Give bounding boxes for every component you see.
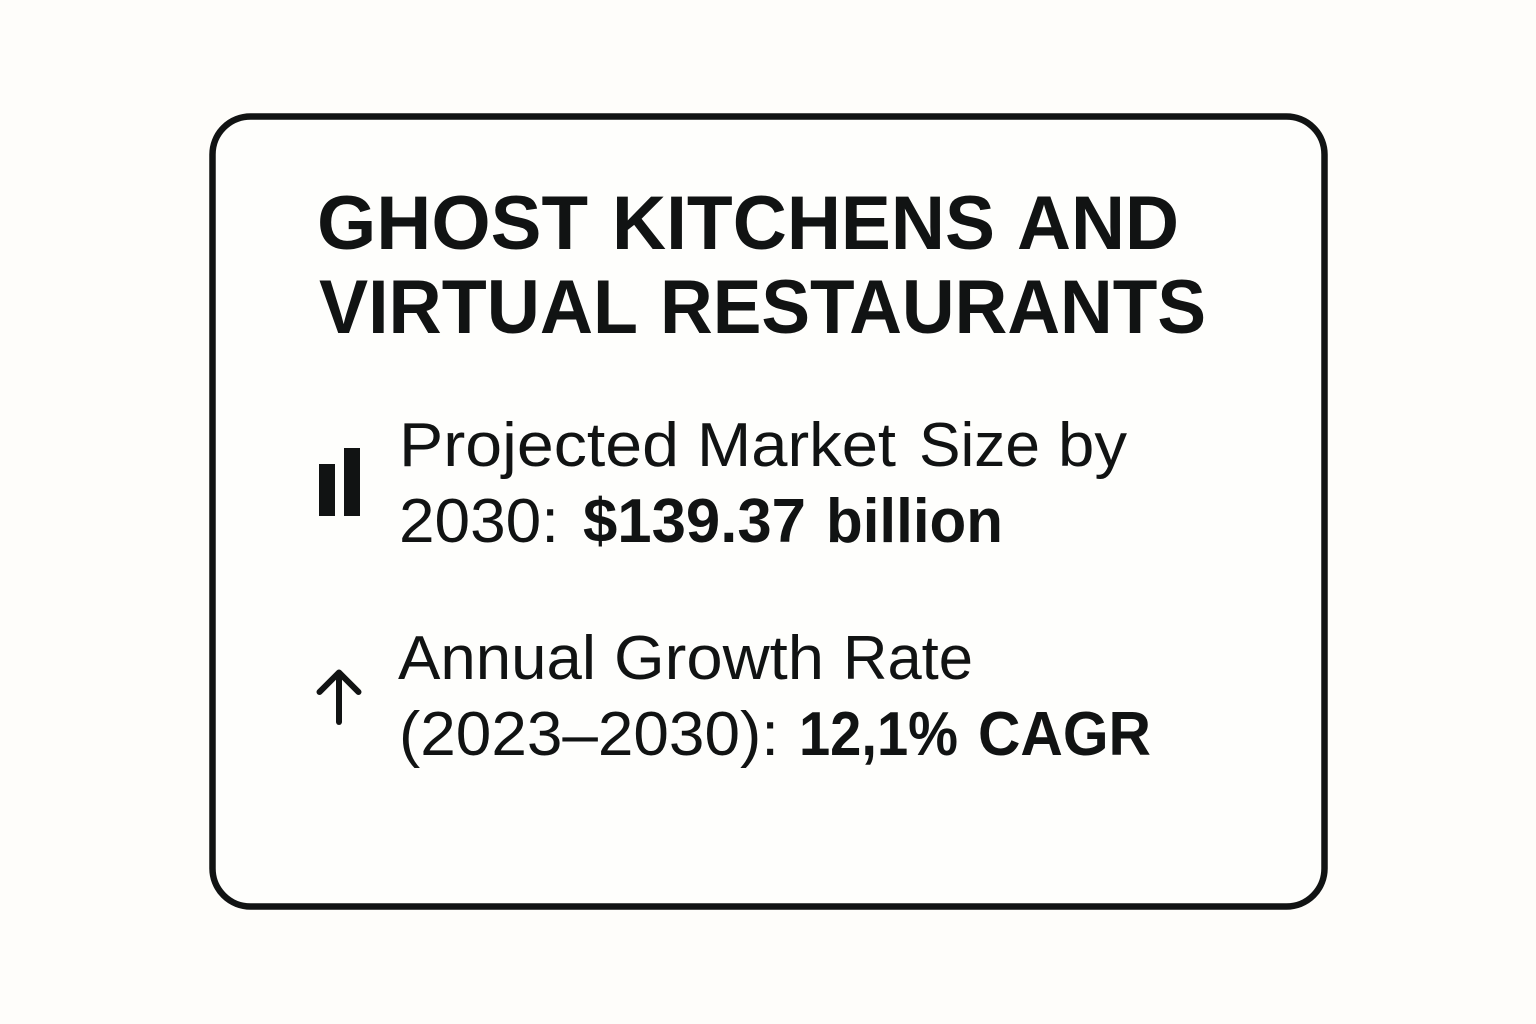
title: KITCHENS [612, 181, 995, 266]
text: annual growth rate: 12,1% [799, 700, 958, 769]
text: projected market size [399, 411, 1127, 556]
icon: up arrow [320, 672, 358, 722]
text: projected market size: $139.37 [583, 487, 806, 556]
text: annual growth rate: (2023–2030): [399, 700, 779, 769]
text: projected market size: billion [826, 487, 1003, 556]
text: annual growth rate: Annual [398, 624, 596, 693]
title: GHOST [317, 181, 588, 266]
title: VIRTUAL [319, 265, 638, 350]
text: annual growth rate: CAGR [978, 700, 1151, 769]
text: projected market size: Size [919, 411, 1040, 480]
text: annual growth rate: Rate [843, 624, 973, 693]
title: AND [1017, 181, 1179, 266]
icon: bar chart [319, 448, 360, 516]
panel: main card [212, 116, 1324, 906]
text: annual growth rate [398, 624, 1151, 769]
text: projected market size: Market [697, 411, 896, 480]
title: RESTAURANTS [660, 265, 1206, 350]
text: projected market size: 2030: [399, 487, 559, 556]
text: annual growth rate: Growth [614, 624, 824, 693]
text: projected market size: Projected [399, 411, 679, 480]
text: projected market size: by [1058, 411, 1127, 480]
title [317, 181, 1206, 350]
